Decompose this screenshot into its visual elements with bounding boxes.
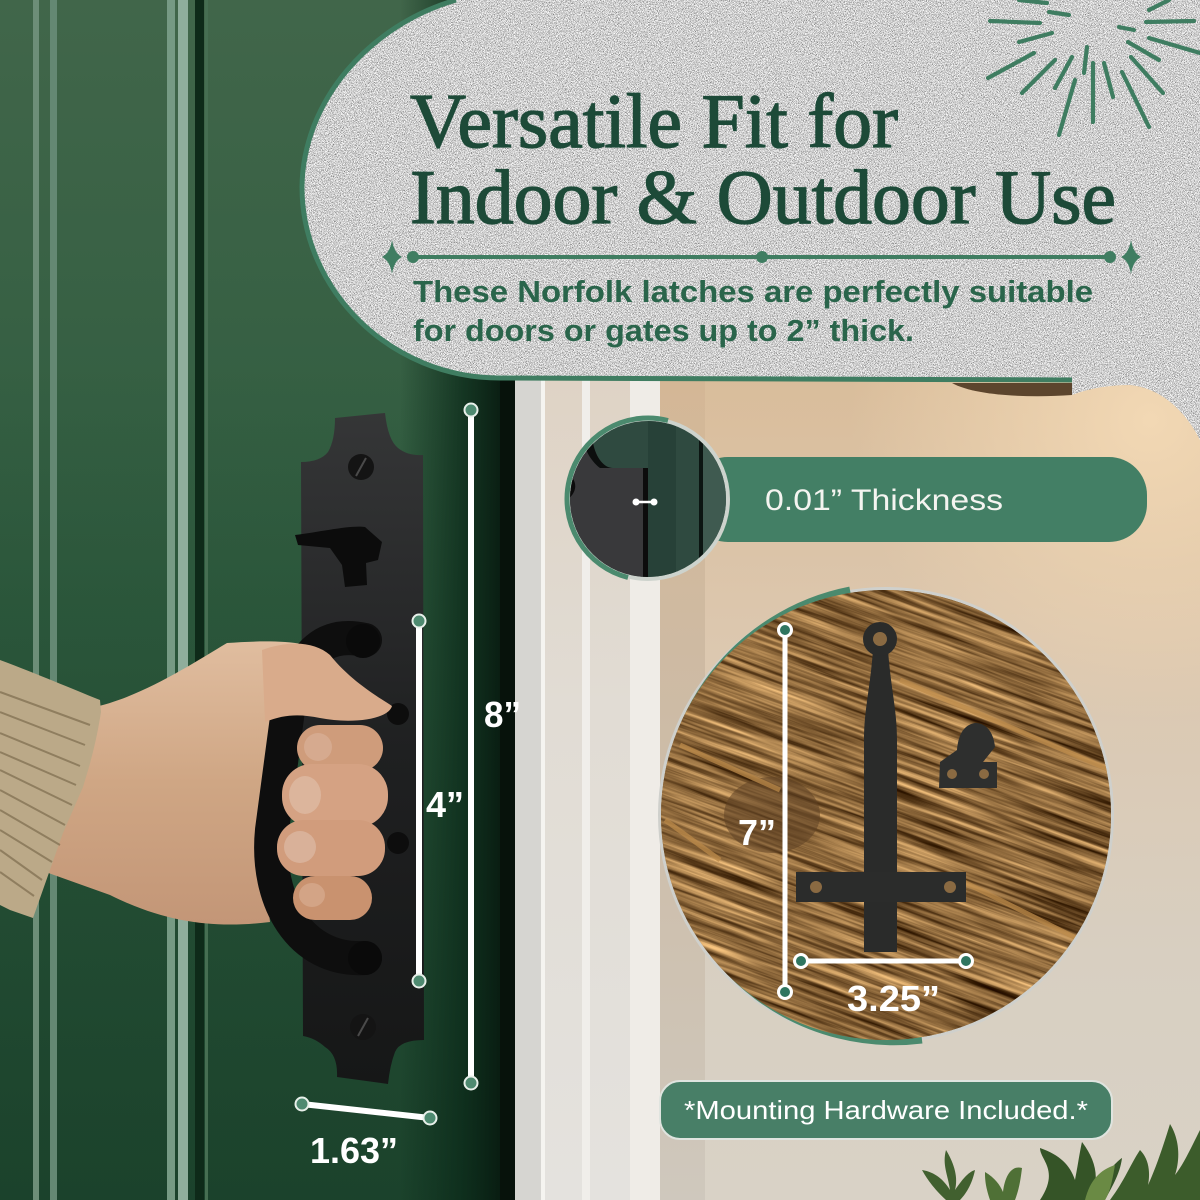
label: 3.25 inch: 3.25” <box>847 978 940 1019</box>
bottom screw <box>350 1014 376 1040</box>
subtitle <box>413 274 1093 348</box>
background: green door <box>0 0 515 1200</box>
measure: 8 inch <box>464 404 478 1090</box>
label: 8 inch: 8” <box>484 694 521 735</box>
measure: 4 inch <box>412 614 426 988</box>
top screw <box>348 454 374 480</box>
measure: 1.63 inch <box>296 1098 436 1124</box>
mounting hardware note: *Mounting Hardware Included.* <box>684 1095 1088 1125</box>
wood circle detail <box>658 586 1114 1046</box>
label: 7 inch: 7” <box>738 812 776 853</box>
label: 1.63 inch: 1.63” <box>310 1130 398 1171</box>
icon: firework burst <box>988 0 1200 135</box>
thumb latch <box>295 527 382 587</box>
grainy header panel <box>280 0 1200 445</box>
sleeve <box>0 660 101 918</box>
measure: 7 inch <box>778 624 792 998</box>
background: white door frame <box>515 380 705 1200</box>
divider ornament <box>382 240 1141 274</box>
latch handle <box>271 624 382 975</box>
hand palm <box>40 641 330 925</box>
thickness inset circle <box>565 415 735 585</box>
mounting hardware note <box>660 1081 1112 1139</box>
background: beige wall <box>705 380 1200 1200</box>
title: Versatile Fit for <box>410 78 898 164</box>
subtitle: for doors or gates up to 2” thick. <box>413 313 914 348</box>
title <box>410 78 1116 240</box>
latch back plate <box>295 413 424 1084</box>
title: Indoor & Outdoor Use <box>410 154 1116 240</box>
lamp fixture <box>952 383 1072 396</box>
middle screws <box>387 703 409 854</box>
catch piece <box>939 723 997 788</box>
fingers <box>262 644 392 920</box>
measure: 3.25 inch <box>794 954 972 968</box>
plant leaves <box>922 1124 1200 1200</box>
T latch bar <box>796 622 966 952</box>
label: 4 inch: 4” <box>426 784 464 825</box>
thickness label: 0.01” Thickness <box>765 484 1003 517</box>
subtitle: These Norfolk latches are perfectly suitable <box>413 274 1093 309</box>
thickness pill <box>690 457 1147 542</box>
thickness marker <box>632 498 658 506</box>
